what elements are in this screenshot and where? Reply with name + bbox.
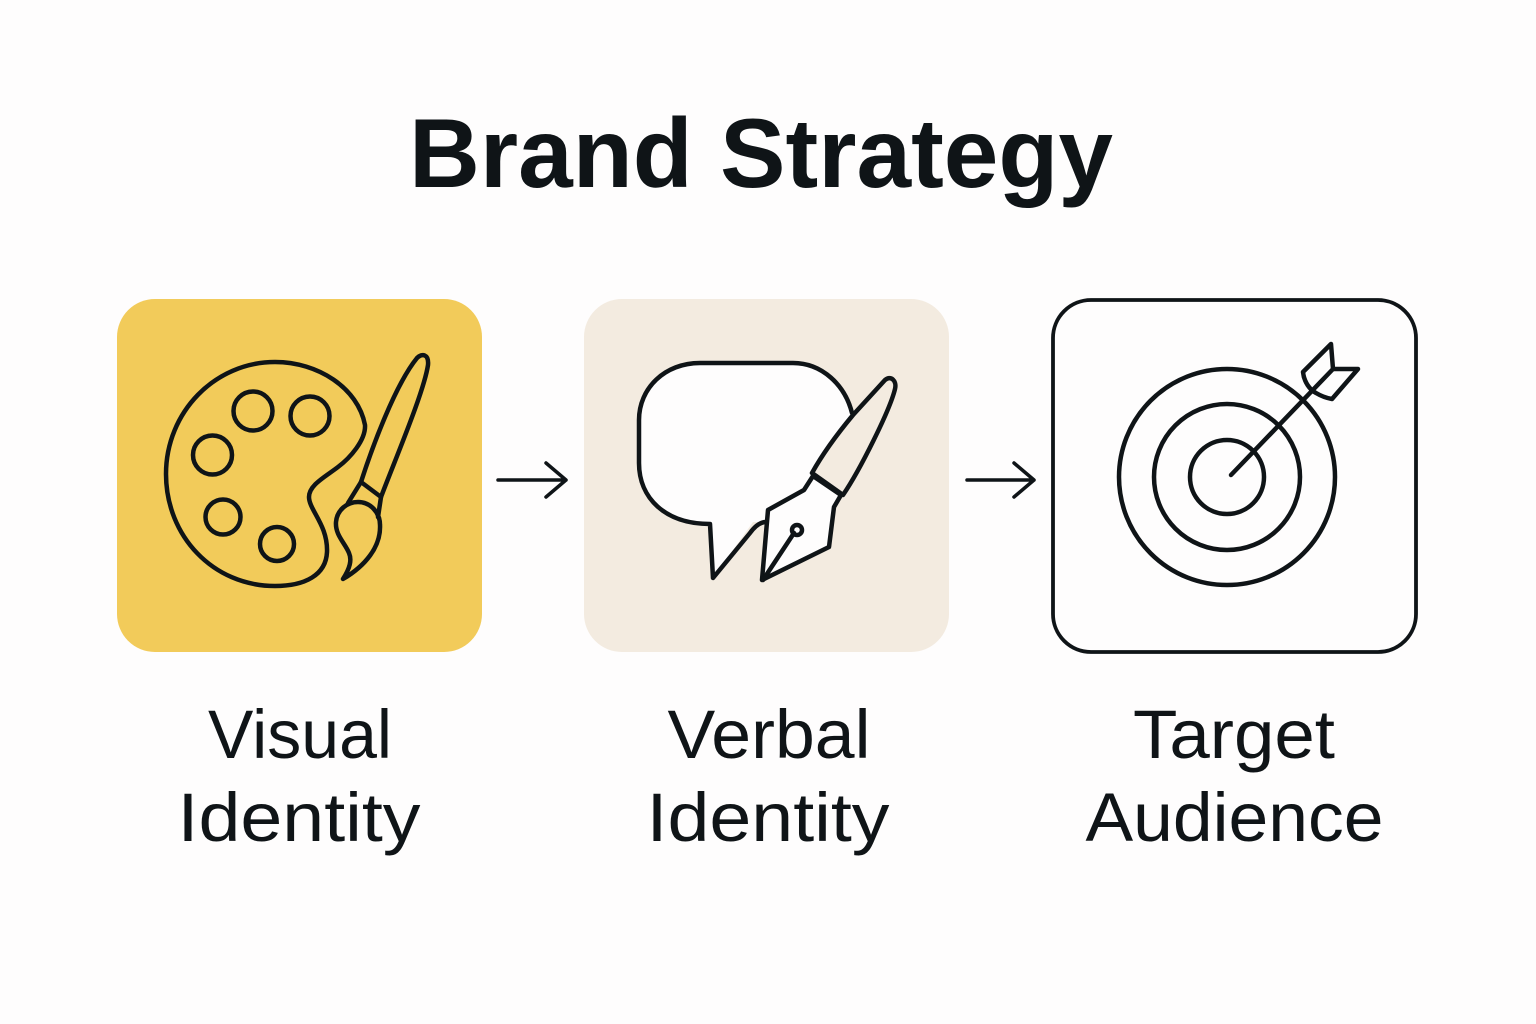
icon: target with arrow	[1119, 344, 1358, 585]
panel: target audience	[1053, 300, 1416, 652]
label: visual identity: Visual	[208, 696, 392, 773]
arrow: visual to verbal	[498, 463, 566, 497]
icon: palette and brush	[166, 355, 428, 586]
label: visual identity: Identity	[178, 779, 421, 856]
label: target audience	[1086, 696, 1384, 856]
arrow: verbal to target	[967, 463, 1034, 497]
panel: visual identity	[117, 299, 482, 652]
title: Brand Strategy	[409, 98, 1113, 208]
label: verbal identity	[646, 696, 890, 856]
label: target audience: Target	[1133, 696, 1335, 773]
icon: speech bubble and fountain pen	[639, 363, 895, 580]
label: visual identity	[178, 696, 421, 856]
panel: verbal identity	[584, 299, 949, 652]
label: verbal identity: Identity	[646, 779, 890, 856]
label: target audience: Audience	[1086, 779, 1384, 856]
label: verbal identity: Verbal	[668, 696, 870, 773]
